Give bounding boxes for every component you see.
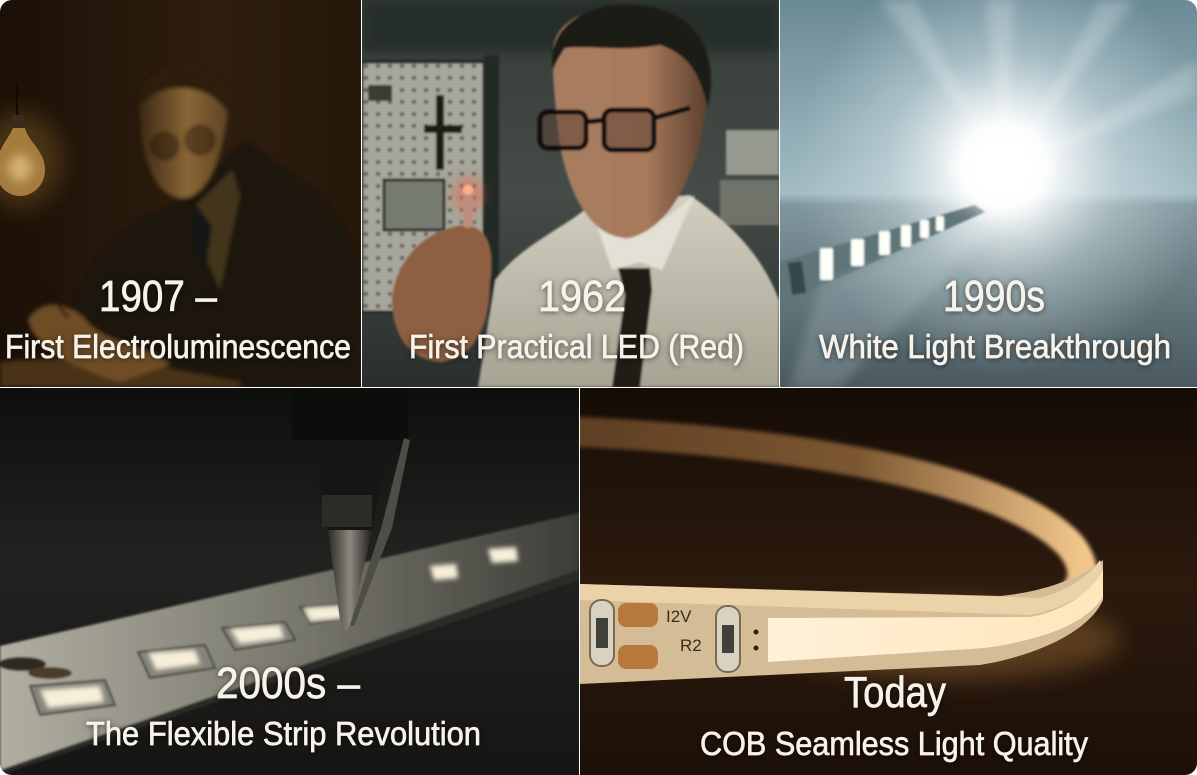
caption: first practical LED: First Practical LED (Red) <box>409 328 744 365</box>
year: 2000s: 2000s – <box>216 659 360 708</box>
icon: glasses <box>540 108 690 150</box>
panel: 1990s white light breakthrough <box>780 0 1197 387</box>
connectors <box>590 600 740 672</box>
COB glowing strip <box>768 570 1103 662</box>
soldering tool <box>322 438 410 632</box>
panel: 1907 first electroluminescence <box>0 0 361 387</box>
COB LED strip: R2 <box>680 636 702 655</box>
caption: first electroluminescence: First Electroluminescence <box>5 328 351 365</box>
caption: white light breakthrough: White Light Breakthrough <box>819 328 1171 365</box>
caption: the flexible strip revolution: The Flexible Strip Revolution <box>86 715 481 752</box>
strip markings: I2V <box>666 607 692 626</box>
year: 1962: 1962 <box>538 272 626 321</box>
figure: scientist <box>392 5 779 387</box>
icon: red LED in hand <box>452 177 484 228</box>
year: today: Today <box>844 668 946 717</box>
panel: today COB seamless light <box>580 388 1197 775</box>
flexible strip <box>0 513 579 775</box>
light rays <box>882 0 1197 136</box>
panel: 2000s flexible strip revolution <box>0 388 579 775</box>
COB LED strip <box>580 560 1120 684</box>
icon: glowing bulb <box>0 85 62 208</box>
LED strip <box>780 205 1000 387</box>
pegboard <box>362 55 779 315</box>
solder pads <box>618 603 658 669</box>
year: 1990s: 1990s <box>943 272 1045 321</box>
panel: 1962 first practical LED <box>362 0 779 387</box>
year: 1907: 1907 – <box>99 272 217 321</box>
caption: COB seamless light quality: COB Seamless Light Quality <box>700 725 1088 762</box>
light arc <box>580 432 1082 605</box>
figure: man writing <box>0 64 361 387</box>
